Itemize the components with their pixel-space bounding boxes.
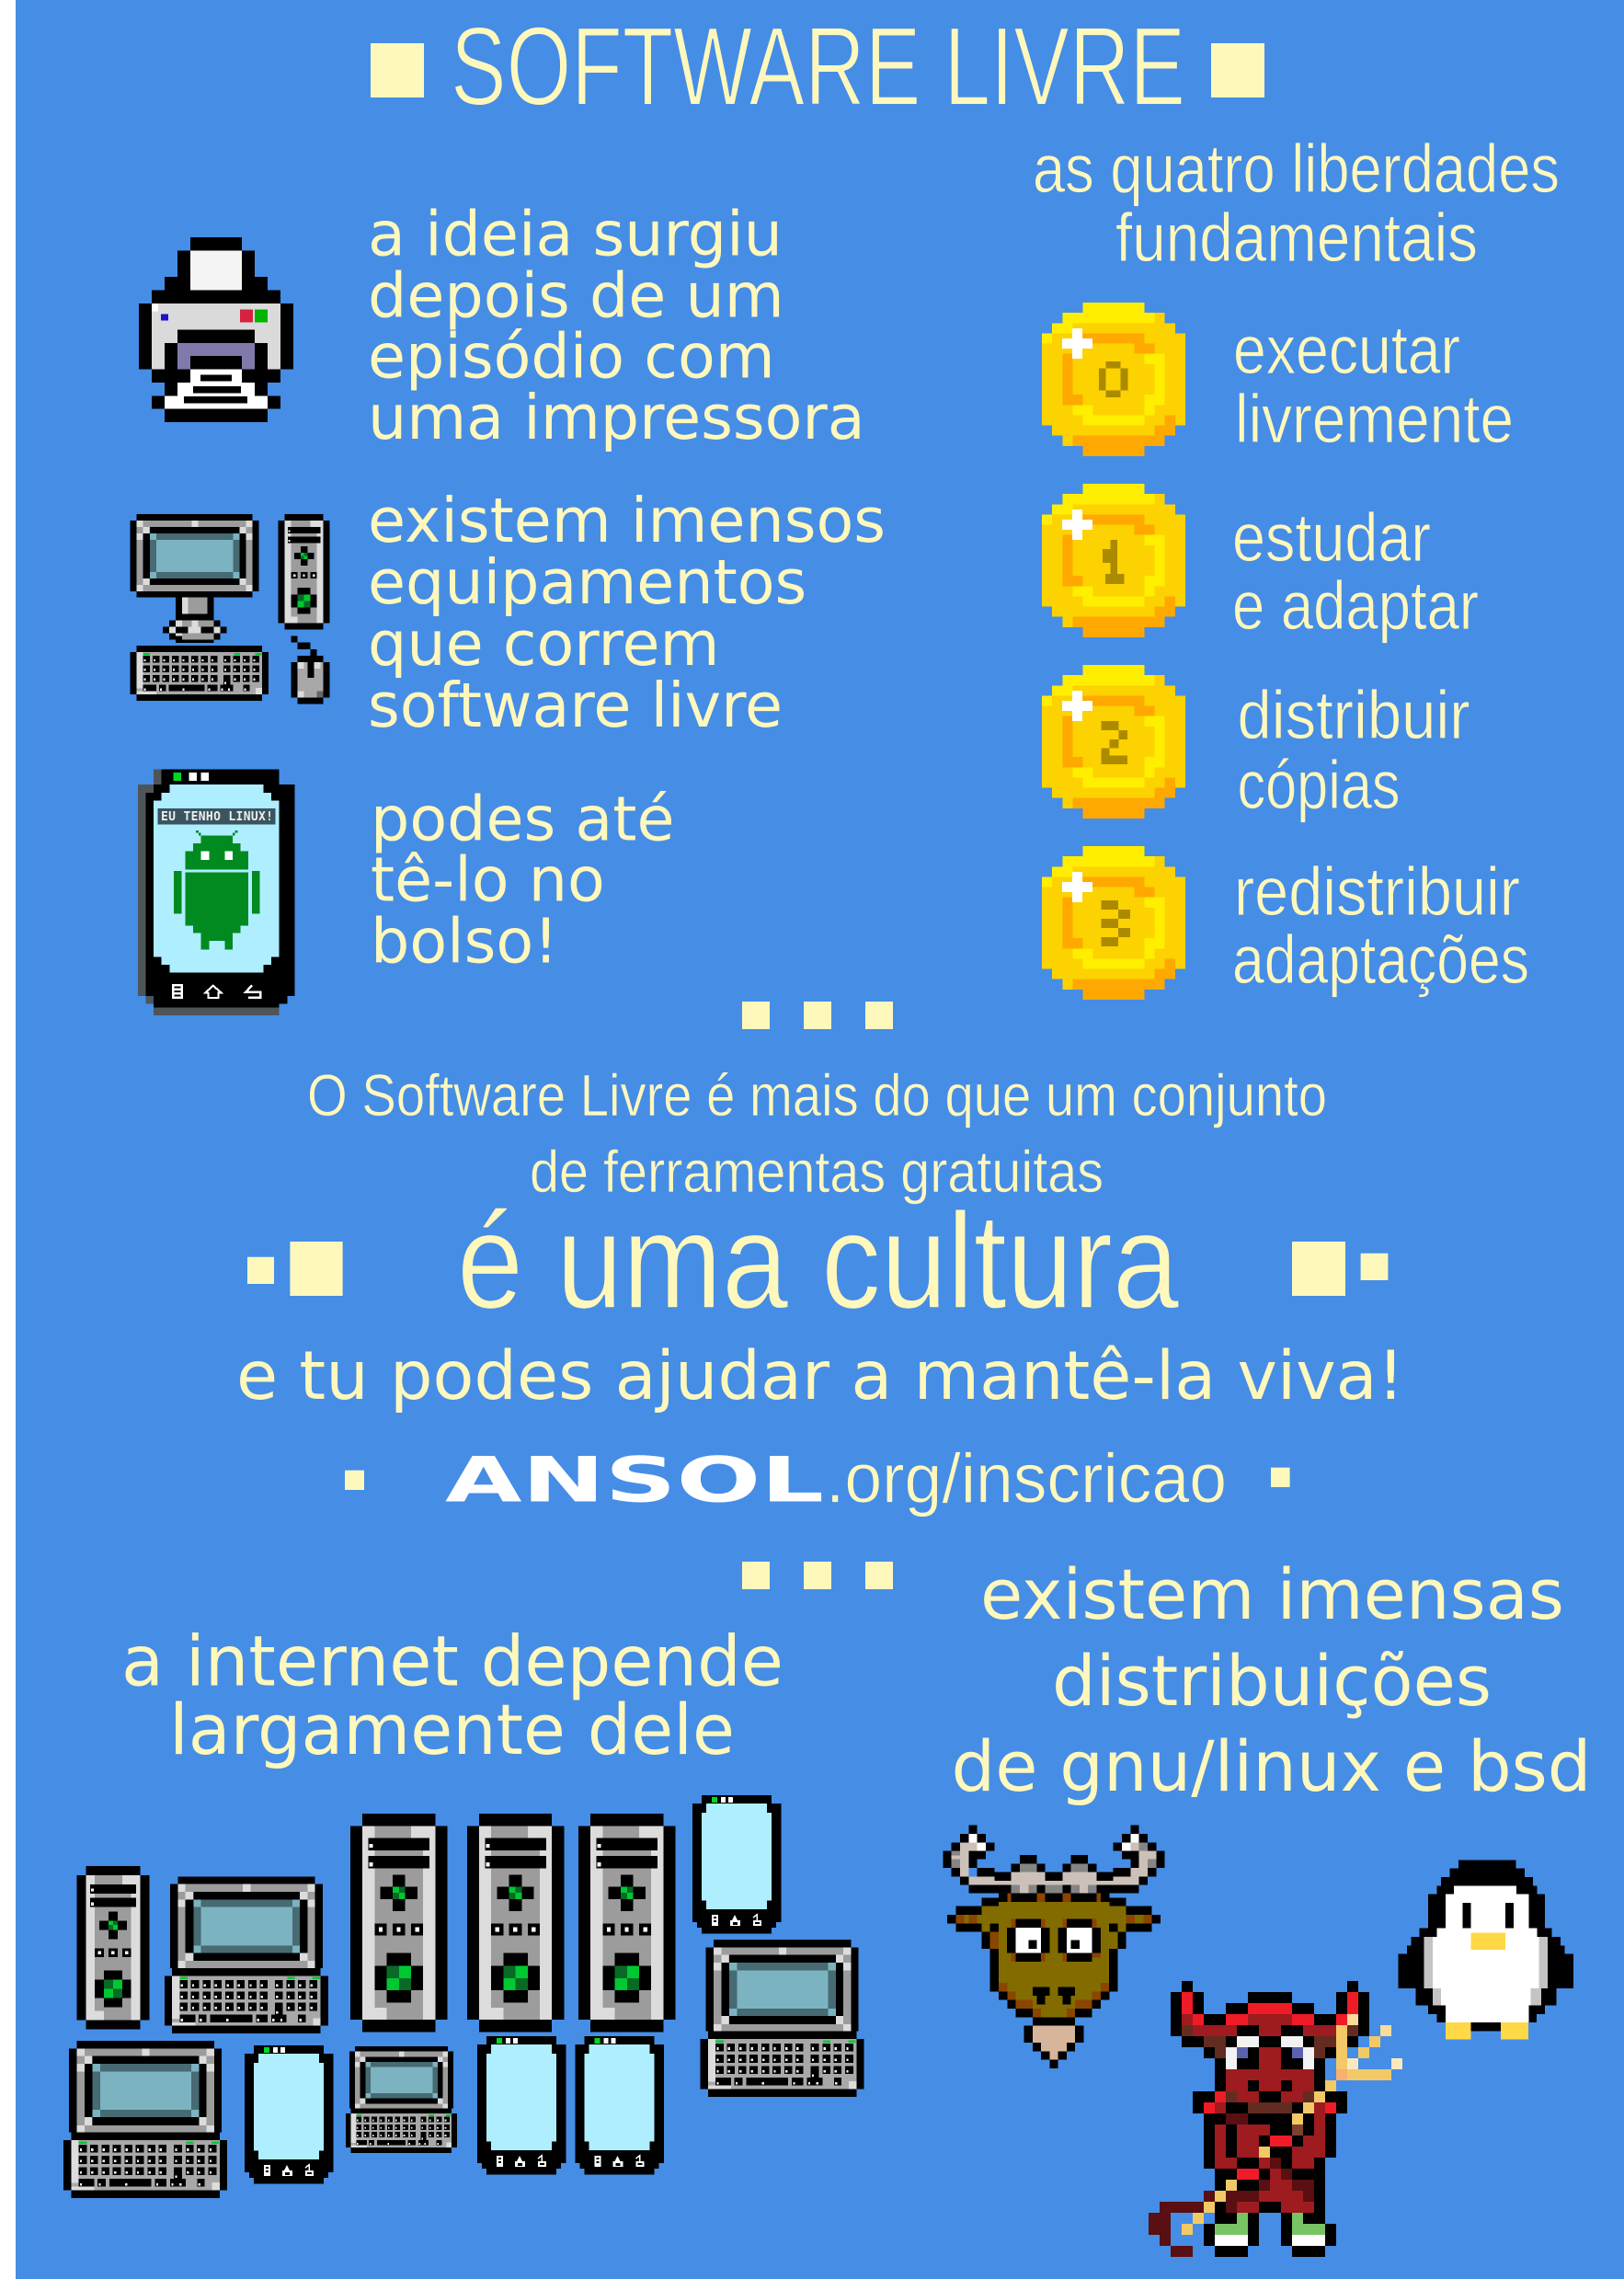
squares right	[1292, 1242, 1388, 1296]
text: freedom 0	[1233, 312, 1514, 457]
icon: bsd daemon	[1149, 1987, 1402, 2251]
text: freedom 0: livremente	[1235, 381, 1514, 457]
small tower	[77, 1866, 149, 2029]
text: internet: largamente dele	[169, 1689, 735, 1770]
server tower 1	[350, 1814, 448, 2032]
large computer C	[63, 2041, 227, 2198]
culture text: é uma cultura	[457, 1185, 1180, 1337]
icon: desktop computer	[131, 514, 330, 704]
icon: coin 1	[1042, 484, 1185, 637]
squares left	[247, 1242, 343, 1296]
text: freedom 1: estudar	[1232, 499, 1431, 576]
text: pocket: bolso!	[371, 905, 558, 977]
large computer A	[165, 1876, 328, 2033]
text: printer story: episódio com	[368, 321, 775, 393]
heading: four freedoms: fundamentais	[1115, 200, 1478, 276]
link: ansol	[345, 1440, 1290, 1517]
text: freedom 1	[1232, 499, 1479, 644]
separator dots bottom	[742, 1562, 893, 1589]
phone top	[692, 1795, 781, 1934]
server tower 2	[467, 1814, 564, 2032]
icon: printer	[139, 244, 293, 416]
text: freedom 3: adaptações	[1232, 922, 1529, 998]
phone bottom right	[576, 2036, 664, 2175]
text: equipment: software livre	[368, 670, 783, 741]
icon: tux	[1399, 1860, 1573, 2040]
text: more than tools: de ferramentas gratuitas	[530, 1139, 1104, 1205]
text: more than tools: O Software Livre é mais do que um conjunto	[307, 1062, 1327, 1128]
text: printer story	[368, 199, 865, 453]
text: printer story: depois de um	[368, 259, 784, 331]
text: equipment: equipamentos	[368, 546, 806, 618]
title square right	[1211, 43, 1264, 97]
small square right	[1271, 1468, 1290, 1487]
title	[371, 4, 1264, 129]
text: freedom 2: distribuir	[1238, 677, 1470, 753]
icon: mouse	[292, 636, 330, 704]
title square left	[371, 43, 424, 97]
text: distributions: de gnu/linux e bsd	[951, 1725, 1591, 1807]
text: distributions: distribuições	[1052, 1640, 1492, 1722]
text: pocket: tê-lo no	[371, 844, 605, 916]
text: more than tools	[307, 1062, 1327, 1205]
url text: .org/inscricao	[826, 1440, 1227, 1517]
logo text ANSOL: ANSOL	[445, 1445, 824, 1517]
text: equipment: existem imensos	[368, 485, 886, 556]
text: internet	[121, 1620, 783, 1770]
text: freedom 2: cópias	[1238, 747, 1400, 823]
text: keep it alive: e tu podes ajudar a mantê-la viva!	[236, 1337, 1404, 1415]
text: freedom 3	[1232, 853, 1529, 998]
heading: four freedoms	[1033, 131, 1560, 276]
text: freedom 2	[1238, 677, 1470, 823]
icon: coin 0	[1042, 303, 1185, 456]
phone bottom left	[245, 2045, 333, 2184]
icon: gnu	[943, 1826, 1165, 2068]
phone label: EU TENHO LINUX!	[161, 810, 273, 824]
text: internet: a internet depende	[121, 1620, 783, 1702]
icon: android phone	[138, 769, 295, 1015]
separator dots top	[742, 1002, 893, 1029]
text: equipment	[368, 485, 886, 741]
text: pocket: podes até	[371, 784, 674, 855]
title text: SOFTWARE LIVRE	[451, 4, 1185, 129]
text: equipment: que correm	[368, 608, 719, 680]
server tower 3	[578, 1814, 676, 2032]
icon: coin 2	[1042, 665, 1185, 819]
text: distributions	[951, 1553, 1591, 1807]
text: freedom 0: executar	[1233, 312, 1460, 388]
text: pocket	[371, 784, 674, 977]
large computer B	[701, 1940, 864, 2097]
text: freedom 1: e adaptar	[1232, 567, 1479, 644]
icon: monitor stand	[163, 598, 227, 643]
text: printer story: a ideia surgiu	[368, 199, 783, 270]
small computer D	[346, 2046, 457, 2153]
phone bottom middle	[477, 2036, 566, 2175]
text: distributions: existem imensas	[980, 1553, 1564, 1635]
heading: é uma cultura	[247, 1185, 1388, 1337]
small square left	[345, 1471, 364, 1490]
icon: coin 3	[1042, 846, 1185, 1000]
text: freedom 3: redistribuir	[1234, 853, 1520, 930]
text: printer story: uma impressora	[368, 382, 865, 453]
device cluster	[63, 1795, 864, 2198]
